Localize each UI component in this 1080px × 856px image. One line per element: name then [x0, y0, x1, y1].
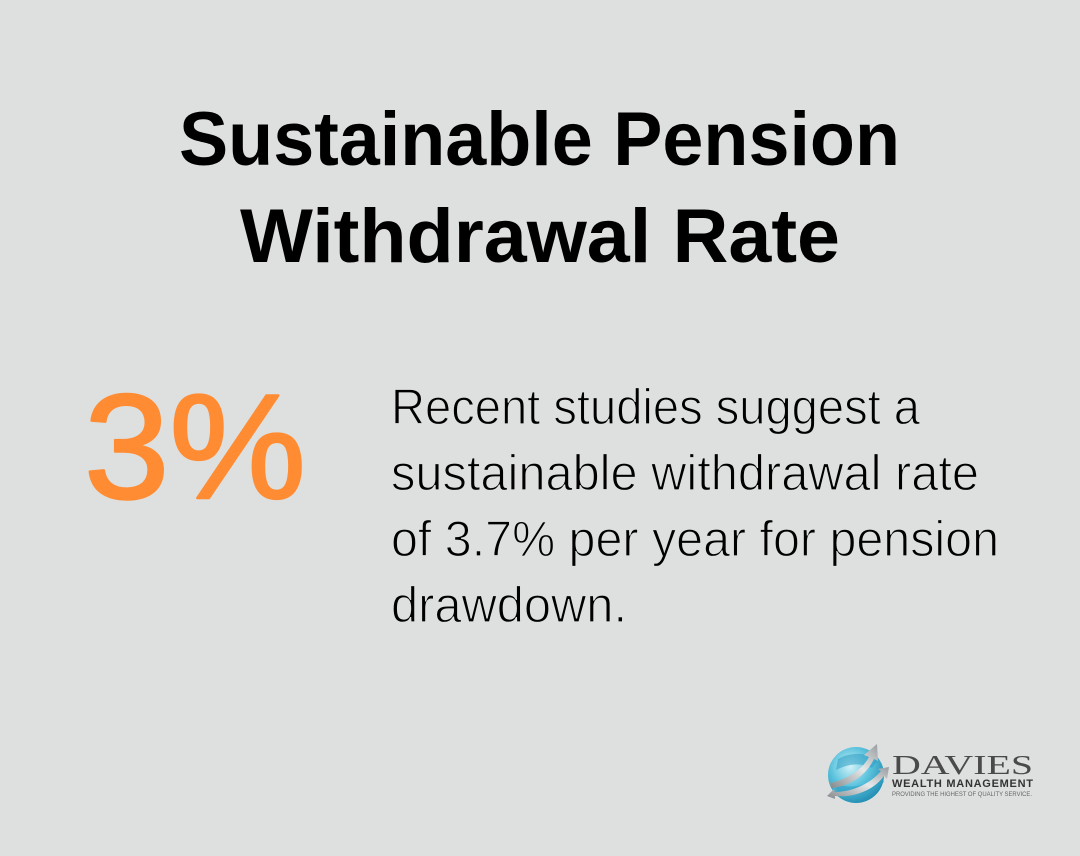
description text: Recent studies suggest a: [391, 379, 920, 435]
description text: drawdown.: [391, 577, 627, 633]
icon: globe with arrows: [827, 744, 889, 803]
description text: [391, 379, 999, 633]
title: Sustainable Pension: [179, 97, 900, 182]
description text: sustainable withdrawal rate: [391, 445, 979, 501]
description text: of 3.7% per year for pension: [391, 511, 999, 567]
logo: Davies Wealth Management: [827, 744, 1033, 803]
title: [179, 97, 900, 279]
logo subtitle: WEALTH MANAGEMENT: [892, 778, 1033, 790]
logo tagline: PROVIDING THE HIGHEST OF QUALITY SERVICE.: [892, 791, 1032, 798]
big statistic: 3%: 3%: [84, 363, 306, 530]
title: Withdrawal Rate: [240, 194, 840, 279]
logo name: DAVIES: [892, 750, 1033, 780]
